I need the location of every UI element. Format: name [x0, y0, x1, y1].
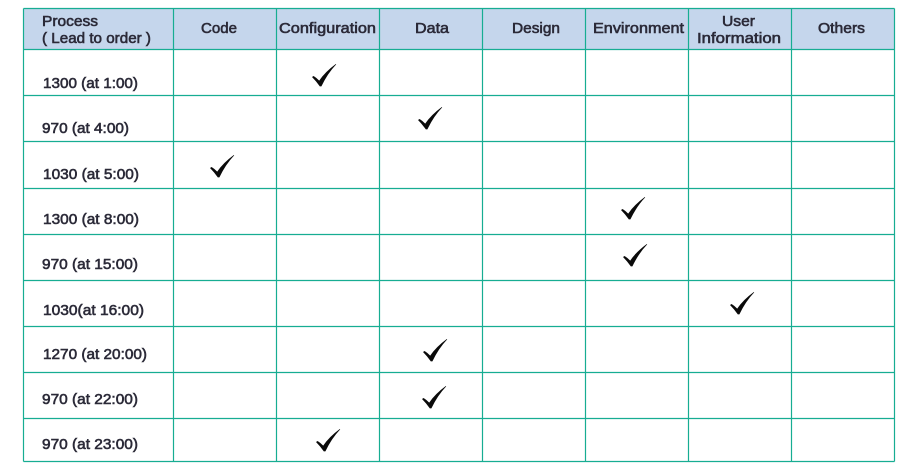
- process row labels: 1300 (at 8:00): [43, 211, 139, 228]
- table header labels: Code: [201, 20, 237, 37]
- process row labels: 1030 (at 5:00): [43, 166, 139, 183]
- table header labels: Information: [697, 30, 781, 47]
- table header labels: Data: [415, 20, 450, 37]
- header row background: [24, 8, 894, 50]
- table header labels: [42, 13, 865, 47]
- process row labels: 970 (at 22:00): [42, 391, 138, 408]
- process row labels: 970 (at 4:00): [42, 120, 129, 137]
- process row labels: 1030(at 16:00): [43, 302, 144, 319]
- table header labels: ( Lead to order ): [42, 30, 151, 47]
- table header labels: User: [722, 13, 755, 30]
- process row labels: [42, 75, 147, 453]
- table header labels: Others: [818, 20, 865, 37]
- process row labels: 1270 (at 20:00): [43, 346, 147, 363]
- table header labels: Design: [512, 20, 560, 37]
- table header labels: Environment: [593, 20, 685, 37]
- process row labels: 1300 (at 1:00): [43, 75, 138, 92]
- process row labels: 970 (at 23:00): [42, 436, 138, 453]
- table header labels: Configuration: [279, 20, 376, 37]
- process row labels: 970 (at 15:00): [42, 256, 138, 273]
- table header labels: Process: [42, 13, 98, 30]
- check marks: [210, 64, 754, 451]
